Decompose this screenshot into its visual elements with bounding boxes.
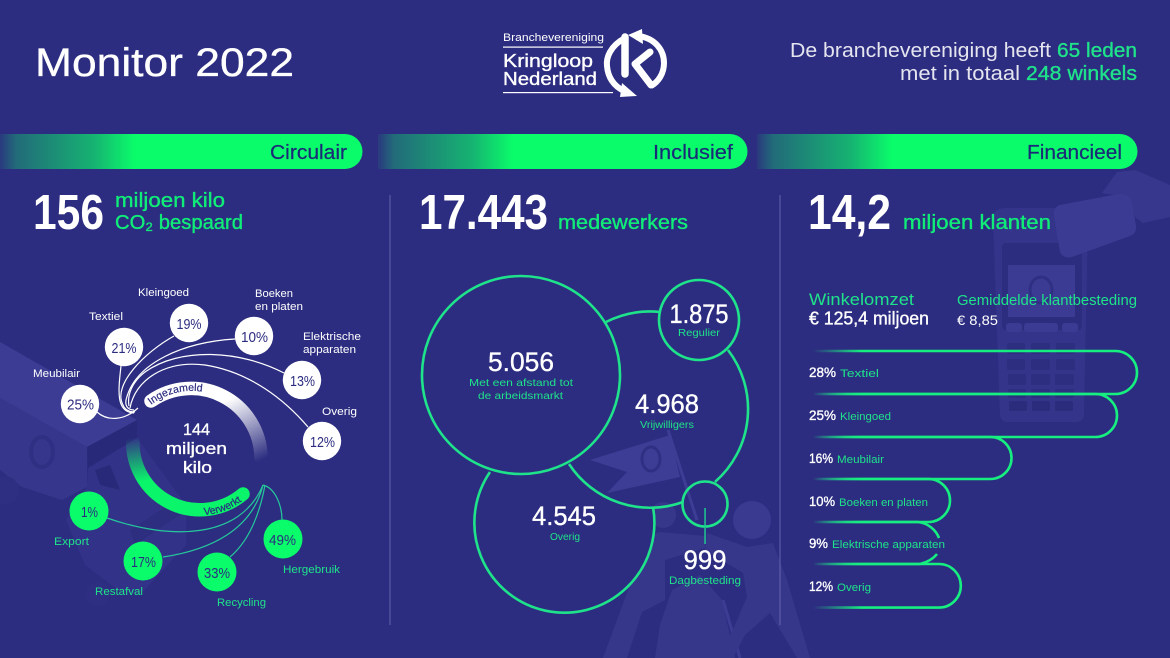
headline: 14,2 miljoen klanten — [808, 186, 1051, 240]
circle: Overig 4.545: Overig — [550, 531, 580, 543]
processed: Hergebruik 49%: Hergebruik — [283, 564, 341, 576]
bar: Textiel 28%: Textiel — [840, 368, 879, 380]
collected: Kleingoed 19%: 19% — [176, 316, 202, 333]
bar: Boeken en platen 10%: Boeken en platen — [839, 497, 928, 509]
collected: Textiel 21%: Textiel — [89, 311, 123, 323]
circle: Vrijwilligers 4.968: Vrijwilligers — [640, 419, 694, 431]
center label: 144 miljoen kilo: kilo — [183, 459, 212, 477]
heading bar: Financieel: Financieel — [1027, 142, 1122, 164]
illustration: payment terminal and card — [993, 170, 1170, 422]
arc: Ingezameld: Ingezameld — [147, 383, 202, 404]
heading bar: Financieel — [757, 134, 1137, 169]
headline: 156 miljoen kilo: miljoen kilo — [115, 190, 225, 212]
bar: Overig 12%: Overig — [837, 582, 871, 594]
headline: 14,2 miljoen klanten: 14,2 — [808, 186, 891, 240]
arc: Verwerkt: Verwerkt — [203, 496, 242, 515]
circle: Met een afstand tot de arbeidsmarkt 5.056 — [422, 276, 620, 474]
collected: Kleingoed 19%: Kleingoed — [138, 287, 189, 299]
header statement — [790, 40, 1137, 85]
processed: Export 1%: 1% — [81, 504, 98, 521]
logo: Branchevereniging Kringloop Nederland: Branchevereniging — [503, 32, 604, 44]
connector lines: collected — [97, 336, 308, 427]
circle: Met een afstand tot de arbeidsmarkt 5.056: 5.056 — [488, 347, 554, 377]
stat: Gemiddelde klantbesteding — [957, 292, 1137, 328]
collected: Overig 12%: 12% — [310, 434, 335, 451]
collected: Textiel 21%: 21% — [112, 340, 136, 357]
center label: 144 miljoen kilo: miljoen — [166, 440, 227, 458]
arc: Verwerkt — [126, 439, 250, 516]
panel: inclusief — [378, 134, 748, 613]
bar chart: winkelomzet per categorie — [809, 351, 1137, 608]
bar: Elektrische apparaten 9%: Elektrische apparaten — [832, 539, 945, 551]
logo: Branchevereniging Kringloop Nederland: Kringloop — [503, 51, 593, 71]
collected: Overig 12% — [303, 406, 357, 460]
collected: Meubilair 25% — [33, 368, 99, 423]
circle: Vrijwilligers 4.968 — [569, 311, 748, 508]
collected: Boeken en platen 10% — [235, 288, 303, 355]
center label: 144 miljoen kilo — [166, 421, 227, 477]
bar: Textiel 28%: 28% — [809, 364, 836, 380]
bar: Textiel 28% — [809, 351, 1137, 394]
collected: Boeken en platen 10%: 10% — [241, 329, 268, 346]
stat: Gemiddelde klantbesteding: Gemiddelde klantbesteding — [957, 292, 1137, 309]
panel: circulair — [0, 134, 362, 609]
center label: 144 miljoen kilo: 144 — [183, 421, 210, 439]
processed: Export 1%: Export — [54, 536, 89, 548]
heading bar: Inclusief: Inclusief — [653, 142, 733, 164]
bar: Kleingoed 25% — [809, 394, 1117, 437]
circle: Met een afstand tot de arbeidsmarkt 5.056: de arbeidsmarkt — [478, 390, 563, 402]
bar: Kleingoed 25%: 25% — [809, 407, 836, 423]
title: Monitor 2022 — [35, 41, 294, 85]
collected: Kleingoed 19% — [138, 287, 208, 342]
headline: 17.443 medewerkers — [419, 186, 688, 240]
panel: financieel — [757, 134, 1137, 608]
circle: Regulier 1.875 — [659, 280, 739, 360]
headline: 14,2 miljoen klanten: miljoen klanten — [903, 212, 1051, 234]
logo: Branchevereniging Kringloop Nederland: Nederland — [503, 69, 597, 89]
stat: Winkelomzet: Winkelomzet — [809, 290, 914, 309]
processed: Restafval 17%: Restafval — [95, 586, 143, 598]
headline: 156 miljoen kilo: 156 — [33, 186, 104, 240]
headline: 17.443 medewerkers: medewerkers — [558, 212, 688, 234]
processed: Restafval 17% — [95, 542, 162, 598]
headline: 17.443 medewerkers: 17.443 — [419, 186, 548, 240]
bar: Meubilair 16%: 16% — [809, 450, 833, 466]
circle: Vrijwilligers 4.968: 4.968 — [635, 389, 699, 419]
header statement: met in totaal — [900, 63, 1020, 85]
header statement: De branchevereniging heeft — [790, 40, 1051, 62]
collected: Elektrische apparaten 13%: apparaten — [303, 344, 356, 356]
bar: Overig 12%: 12% — [809, 578, 833, 594]
heading bar: Inclusief — [378, 134, 747, 169]
headline: 156 miljoen kilo — [33, 186, 243, 240]
collected: Textiel 21% — [89, 311, 143, 366]
circle: Dagbesteding 999: 999 — [684, 545, 726, 575]
stat: Winkelomzet: € 125,4 miljoen — [809, 308, 929, 328]
circle: Overig 4.545: 4.545 — [532, 501, 596, 531]
bar: Elektrische apparaten 9% — [809, 522, 945, 564]
collected: Boeken en platen 10%: Boeken — [255, 288, 293, 300]
bar: Kleingoed 25%: Kleingoed — [840, 411, 891, 423]
processed: Recycling 33% — [198, 552, 266, 609]
bar: Meubilair 16% — [809, 437, 1012, 479]
bar: Boeken en platen 10% — [809, 479, 950, 522]
bar: Elektrische apparaten 9%: 9% — [809, 535, 828, 551]
collected: Overig 12%: Overig — [322, 406, 357, 418]
circle: Overig 4.545 — [474, 472, 654, 613]
collected: Elektrische apparaten 13%: Elektrische — [303, 331, 361, 343]
processed: Export 1% — [54, 492, 108, 548]
collected: Elektrische apparaten 13%: 13% — [290, 373, 315, 390]
collected: Meubilair 25%: 25% — [67, 396, 94, 414]
header statement: 248 winkels — [1026, 63, 1137, 85]
bar: Boeken en platen 10%: 10% — [809, 493, 835, 509]
circle: Met een afstand tot de arbeidsmarkt 5.056: Met een afstand tot — [469, 377, 573, 389]
heading bar: Circulair — [0, 134, 362, 169]
circle: Dagbesteding 999 — [669, 482, 741, 587]
bar: Overig 12% — [809, 564, 961, 608]
heading bar: Circulair: Circulair — [270, 142, 347, 164]
processed: Restafval 17%: 17% — [131, 554, 156, 571]
illustration: truck — [0, 342, 186, 606]
illustration: flag and people — [590, 430, 810, 658]
circle: Dagbesteding 999: Dagbesteding — [669, 575, 741, 587]
arc: Ingezameld — [144, 382, 268, 460]
processed: Hergebruik 49% — [264, 520, 341, 576]
connector lines: processed — [107, 485, 282, 557]
processed: Recycling 33%: Recycling — [217, 597, 266, 609]
collected: Boeken en platen 10%: en platen — [255, 301, 303, 313]
processed: Hergebruik 49%: 49% — [269, 532, 296, 549]
collected: Meubilair 25%: Meubilair — [33, 368, 80, 380]
stat: Gemiddelde klantbesteding: € 8,85 — [957, 312, 998, 328]
circle: Regulier 1.875: Regulier — [678, 327, 721, 339]
headline: 156 miljoen kilo: CO₂ bespaard — [115, 212, 243, 234]
bar: Meubilair 16%: Meubilair — [837, 454, 884, 466]
logo: Branchevereniging Kringloop Nederland — [503, 29, 664, 97]
collected: Elektrische apparaten 13% — [283, 331, 361, 399]
circle: Regulier 1.875: 1.875 — [670, 299, 728, 329]
stat: Winkelomzet — [809, 290, 929, 328]
header statement: 65 leden — [1057, 40, 1137, 62]
processed: Recycling 33%: 33% — [204, 565, 230, 582]
